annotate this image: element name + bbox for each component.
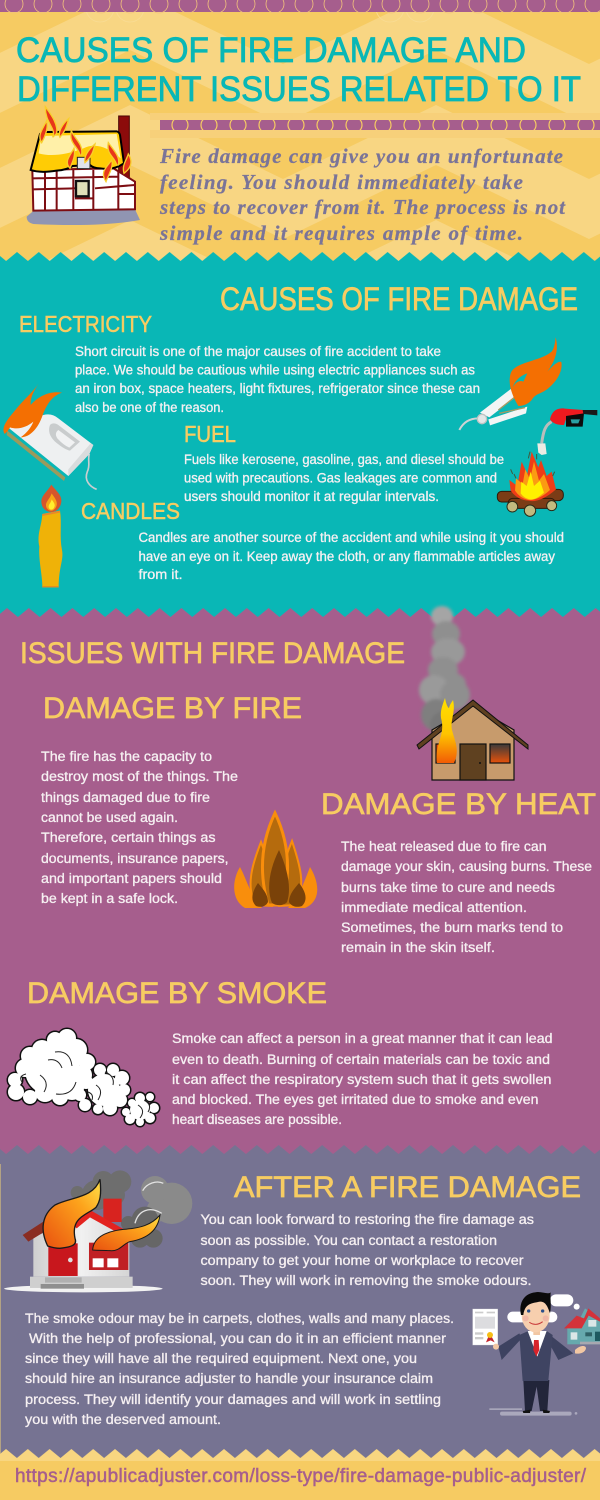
heading: after: AFTER A FIRE DAMAGE: [234, 1171, 581, 1204]
panel: issues with fire damage: [0, 606, 600, 1154]
icon: flaming iron: [3, 383, 97, 489]
text: damage by heat: immediate medical attention.: [341, 900, 527, 915]
text: after intro: soon as possible. You can contact a restoration: [200, 1233, 497, 1248]
text: fuel: used with precautions. Gas leakages are common and: [184, 470, 497, 486]
icon: flaming hair straightener: [459, 337, 562, 430]
heading: damage by fire: DAMAGE BY FIRE: [43, 692, 302, 725]
text: damage by heat: The heat released due to fire can: [341, 839, 546, 854]
text: after details: process. They will identify your damages and will work in settling: [25, 1392, 441, 1407]
text: after intro: You can look forward to restoring the fire damage as: [200, 1212, 534, 1227]
text: damage by fire: and important papers should: [41, 871, 222, 886]
text: after intro: company to get your home or workplace to recover: [200, 1253, 524, 1268]
text: damage by fire: The fire has the capacity to: [41, 749, 212, 764]
icon: burning house with smoke: [4, 1170, 192, 1292]
icon: burning cottage: [27, 107, 140, 225]
text: damage by smoke: it can affect the respiratory system such that it gets swollen: [172, 1072, 552, 1087]
text: damage by fire: destroy most of the things. The: [41, 769, 238, 784]
text: candles: from it.: [138, 567, 182, 582]
text: damage by smoke: and blocked. The eyes get irritated due to smoke and even: [172, 1092, 538, 1107]
text: after intro: [200, 1212, 534, 1288]
icon: smoke plume: [419, 606, 470, 739]
icon: insurance adjuster with house and document: [473, 1292, 600, 1416]
heading: electricity: ELECTRICITY: [19, 311, 152, 337]
text: electricity: an iron box, space heaters, light fixtures, refrigerator since these can: [75, 381, 480, 396]
text: after details: The smoke odour may be in carpets, clothes, walls and many places.: [25, 1311, 454, 1326]
title: CAUSES OF FIRE DAMAGE AND: [16, 31, 526, 70]
text: damage by smoke: [172, 1031, 552, 1127]
text: damage by fire: things damaged due to fire: [41, 790, 210, 805]
text: after details: should hire an insurance adjuster to handle your insurance claim: [25, 1371, 433, 1386]
text: damage by heat: burns take time to cure and needs: [341, 880, 555, 895]
text: after details: [25, 1311, 454, 1427]
icon: fuel nozzle: [537, 408, 597, 455]
text: electricity: place. We should be cautious while using electric appliances such as: [75, 362, 475, 378]
text: damage by smoke: heart diseases are possible.: [172, 1112, 342, 1127]
text: candles: have an eye on it. Keep away the cloth, or any flammable articles away: [138, 549, 555, 564]
text: damage by fire: [41, 749, 238, 906]
text: fuel: Fuels like kerosene, gasoline, gas, and diesel should be: [184, 452, 504, 467]
title: DIFFERENT ISSUES RELATED TO IT: [17, 70, 581, 109]
text: after details: since they will have all the required equipment. Next one, you: [25, 1351, 417, 1366]
panel: after a fire damage: [0, 1145, 600, 1458]
icon: house on fire: [417, 698, 528, 780]
icon: orange flame: [234, 813, 317, 908]
text: fuel: [184, 452, 504, 504]
text: electricity: Short circuit is one of the major causes of fire accident to take: [75, 344, 441, 359]
text: damage by fire: cannot be used again.: [41, 810, 178, 825]
text: damage by heat: Sometimes, the burn marks tend to: [341, 920, 563, 935]
icon: smoke clouds: [8, 1029, 159, 1126]
panel: footer: [0, 1449, 600, 1500]
text: electricity: [75, 344, 480, 415]
intro text: [159, 144, 566, 245]
panel: causes of fire damage: [0, 252, 600, 617]
ornamental divider: [150, 113, 600, 138]
text: damage by smoke: Smoke can affect a person in a great manner that it can lead: [172, 1031, 552, 1046]
heading: candles: CANDLES: [81, 498, 180, 524]
footer url: https://apublicadjuster.com/loss-type/fire-damage-public-adjuster/: [15, 1466, 587, 1487]
text: damage by heat: [341, 839, 592, 955]
intro text: simple and it requires ample of time.: [159, 221, 523, 245]
intro text: feeling. You should immediately take: [160, 170, 523, 194]
text: electricity: also be one of the reason.: [75, 400, 224, 415]
text: candles: [138, 530, 564, 582]
section background: header: [0, 0, 600, 354]
icon: campfire: [497, 452, 563, 516]
heading: damage by heat: DAMAGE BY HEAT: [321, 788, 596, 821]
text: damage by smoke: even to death. Burning of certain materials can be toxic and: [172, 1052, 550, 1067]
intro text: Fire damage can give you an unfortunate: [159, 144, 563, 168]
heading: damage by smoke: DAMAGE BY SMOKE: [27, 977, 327, 1010]
intro text: steps to recover from it. The process is not: [159, 195, 566, 219]
title: [16, 31, 581, 109]
text: candles: Candles are another source of the accident and while using it you should: [138, 530, 564, 545]
text: after details: you with the deserved amount.: [25, 1412, 221, 1427]
text: damage by fire: Therefore, certain things as: [41, 830, 216, 845]
text: after intro: soon. They will work in removing the smoke odours.: [200, 1273, 532, 1288]
text: fuel: users should monitor it at regular intervals.: [184, 489, 439, 504]
icon: candle: [39, 485, 62, 587]
text: damage by heat: damage your skin, causing burns. These: [341, 859, 592, 874]
text: damage by fire: be kept in a safe lock.: [41, 891, 178, 906]
text: after details: With the help of professional, you can do it in an efficient manner: [29, 1331, 447, 1346]
top decorative band: [0, 0, 600, 22]
heading: fuel: FUEL: [184, 421, 236, 447]
text: damage by fire: documents, insurance papers,: [41, 851, 228, 866]
heading: issues: ISSUES WITH FIRE DAMAGE: [20, 637, 405, 670]
text: damage by heat: remain in the skin itself.: [341, 940, 495, 955]
